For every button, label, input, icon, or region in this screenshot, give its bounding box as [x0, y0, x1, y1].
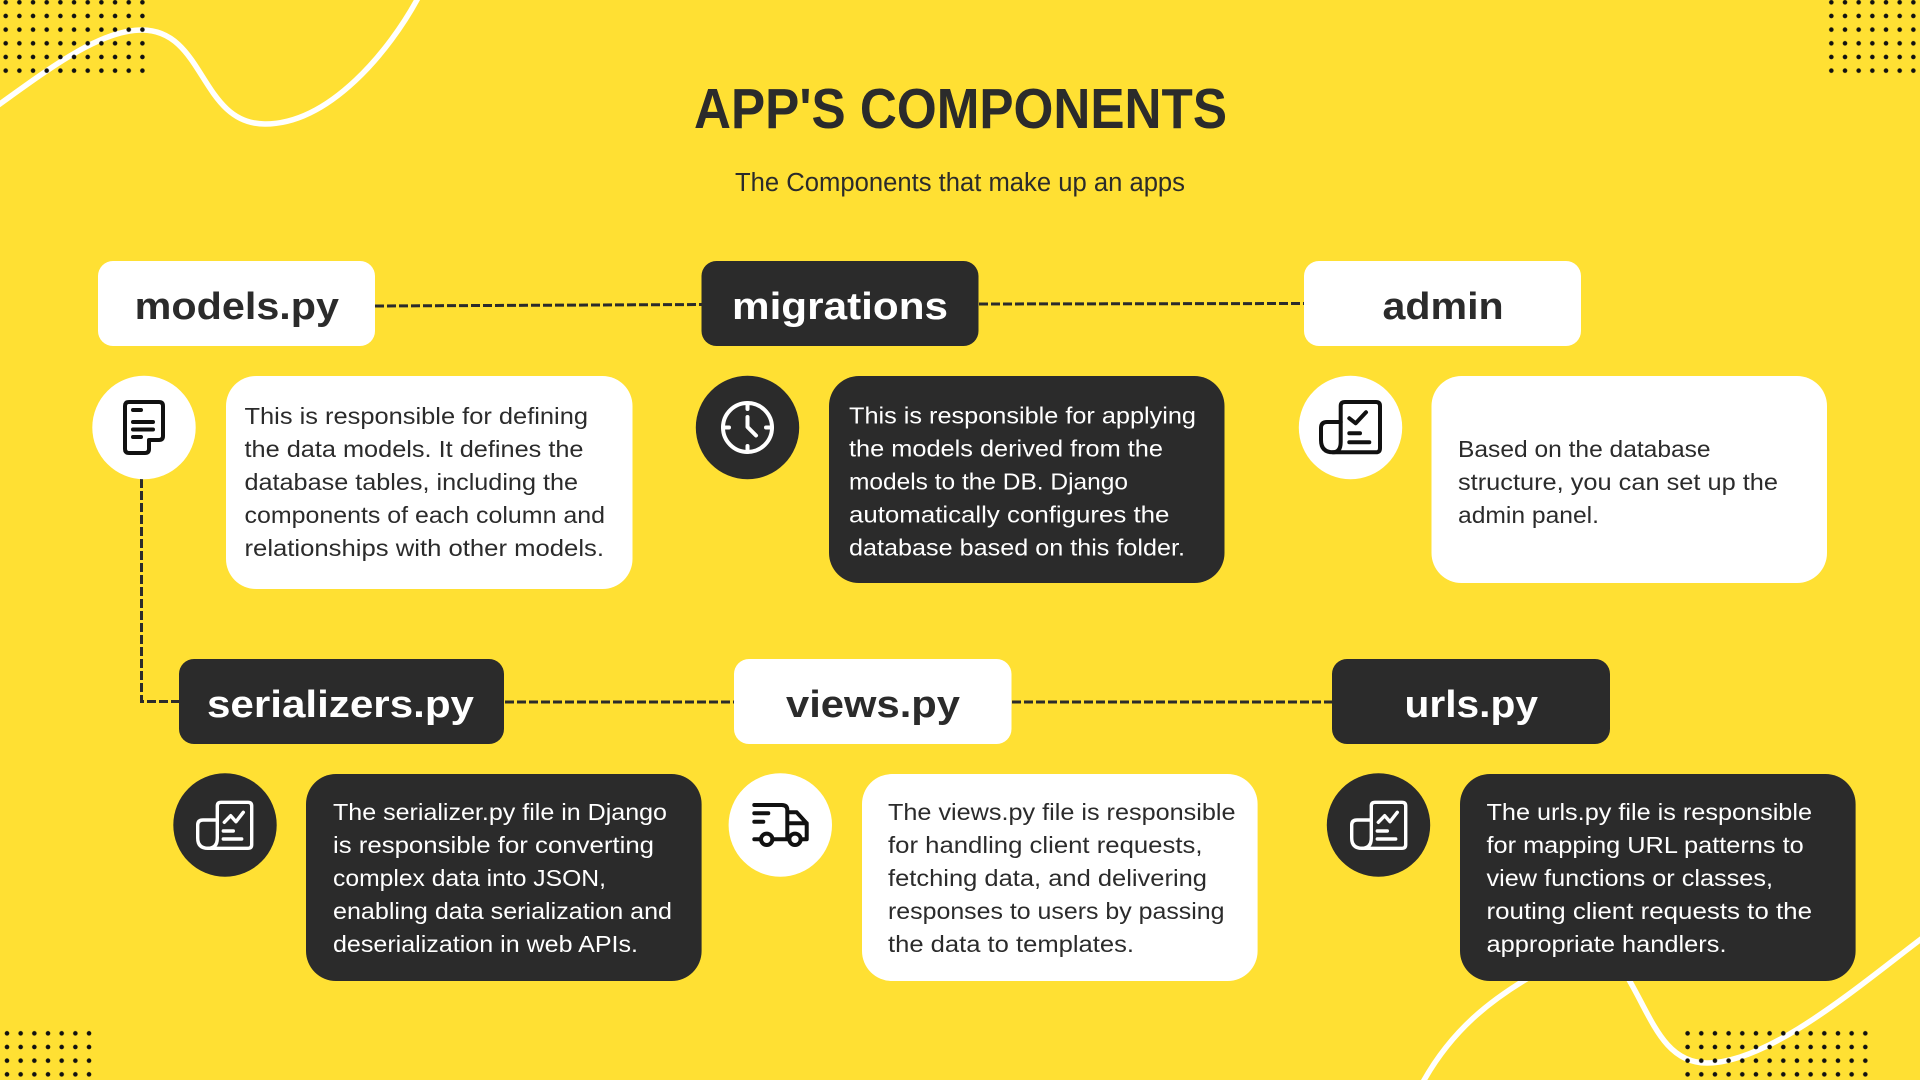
icon: document — [92, 376, 196, 479]
panel: views.py — [729, 659, 1258, 981]
card: views.py description: for handling client requests, — [888, 832, 1202, 858]
card: urls.py description: appropriate handlers. — [1486, 931, 1726, 957]
card: migrations description: This is responsible for applying — [849, 402, 1196, 428]
card: urls.py description: view functions or classes, — [1486, 865, 1773, 891]
connector: serializers.py to views.py — [505, 700, 734, 704]
label: urls.py — [1332, 659, 1610, 744]
card: models.py description: the data models. It defines the — [244, 436, 584, 462]
card: views.py description: fetching data, and delivering — [888, 865, 1207, 891]
card: serializers.py description: The serializer.py file in Django — [333, 799, 667, 825]
card: models.py description: relationships with other models. — [244, 535, 604, 561]
panel: models.py — [92, 261, 633, 589]
card: views.py description: The views.py file is responsible — [888, 799, 1236, 825]
card: migrations description: models to the DB. Django — [849, 468, 1128, 494]
card: migrations description: the models derived from the — [849, 436, 1163, 462]
label: models.py — [98, 261, 375, 346]
card: admin description — [1432, 376, 1827, 583]
card: serializers.py description — [306, 774, 702, 981]
card: views.py description: the data to templates. — [888, 931, 1134, 957]
panel: urls.py — [1327, 659, 1856, 981]
label: admin: admin — [1382, 286, 1504, 328]
card: admin description: Based on the database — [1458, 436, 1711, 462]
label: urls.py: urls.py — [1404, 684, 1538, 726]
card: models.py description: This is responsible for defining — [244, 403, 588, 429]
icon: checklist document — [1299, 376, 1402, 479]
label: serializers.py — [179, 659, 504, 744]
connector: models.py to migrations — [375, 304, 702, 306]
icon: chart document — [1327, 773, 1430, 877]
card: urls.py description: The urls.py file is responsible — [1486, 799, 1812, 825]
card: models.py description — [226, 376, 632, 589]
subtitle: The Components that make up an apps — [735, 169, 1185, 197]
title: APP'S COMPONENTS — [694, 77, 1227, 141]
card: urls.py description — [1460, 774, 1856, 981]
card: urls.py description: routing client requests to the — [1486, 898, 1812, 924]
connector: migrations to admin — [979, 302, 1304, 306]
connector: views.py to urls.py — [1012, 700, 1332, 704]
label: admin — [1304, 261, 1581, 346]
card: views.py description: responses to users by passing — [888, 898, 1224, 924]
label: views.py — [734, 659, 1012, 744]
card: migrations description: database based on this folder. — [849, 534, 1185, 560]
connector: models.py to serializers.py — [142, 479, 179, 702]
card: admin description: admin panel. — [1458, 502, 1599, 528]
icon: chart document — [173, 773, 277, 877]
card: migrations description — [829, 376, 1224, 583]
panel: migrations — [696, 261, 1224, 583]
card: admin description: structure, you can set up the — [1458, 469, 1778, 495]
label: migrations: migrations — [732, 286, 948, 328]
icon: delivery truck — [729, 773, 832, 877]
card: serializers.py description: complex data into JSON, — [333, 865, 606, 891]
card: models.py description: database tables, including the — [244, 469, 578, 495]
label: views.py: views.py — [786, 684, 960, 726]
card: models.py description: components of each column and — [244, 502, 605, 528]
panel: serializers.py — [173, 659, 702, 981]
label: models.py: models.py — [135, 286, 339, 328]
label: serializers.py: serializers.py — [207, 684, 474, 726]
icon: clock — [696, 376, 799, 479]
card: views.py description — [862, 774, 1258, 981]
card: migrations description: automatically configures the — [849, 502, 1169, 528]
card: serializers.py description: is responsible for converting — [333, 832, 654, 858]
panel: admin — [1299, 261, 1827, 583]
card: serializers.py description: deserialization in web APIs. — [333, 931, 638, 957]
card: urls.py description: for mapping URL patterns to — [1486, 832, 1804, 858]
card: serializers.py description: enabling data serialization and — [333, 898, 672, 924]
label: migrations — [702, 261, 978, 346]
